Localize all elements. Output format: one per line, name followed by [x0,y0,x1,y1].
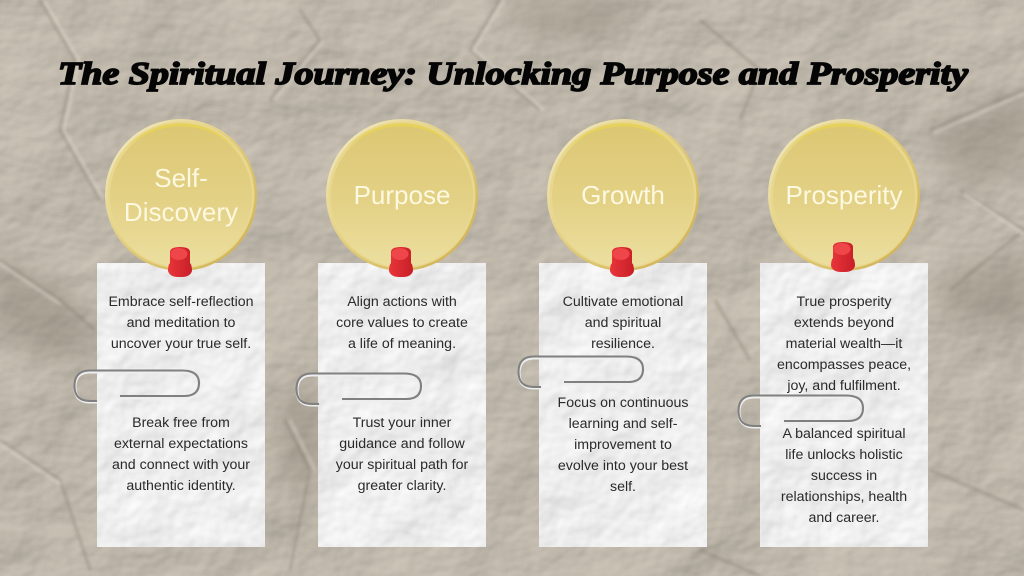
text: Purpose second point: guidance and follow [339,436,465,452]
text: Self-Discovery second point: external expectations [114,436,248,452]
card: Growth paper [539,263,707,547]
text: Growth second point: learning and self- [569,416,678,432]
badge: Purpose [326,119,478,271]
text: Prosperity first point [777,294,911,394]
icon: red push pin [831,242,855,272]
text: Self-Discovery first point: Embrace self-reflection [108,294,254,310]
panel: Purpose [296,119,486,547]
text: Self-Discovery second point [112,415,250,494]
text: Purpose first point [336,294,468,352]
card: Self-Discovery paper [97,263,265,547]
text: Purpose first point: core values to create [336,315,468,331]
text: Growth first point: and spiritual [585,315,661,331]
text: Self-Discovery first point [108,294,254,352]
text: Prosperity second point [781,426,907,526]
icon: paperclip [738,396,864,427]
text: Growth first point: Cultivate emotional [563,294,683,310]
text: Purpose first point: Align actions with [347,294,457,310]
text: Prosperity second point: life unlocks holistic [785,447,903,463]
badge: Growth [547,119,699,271]
text: Purpose second point: your spiritual path for [336,457,469,473]
icon: paperclip [296,374,422,405]
card: Prosperity paper [760,263,928,547]
card: Purpose paper [318,263,486,547]
text: Growth second point: self. [610,479,636,495]
text: Prosperity second point: A balanced spiritual [782,426,906,442]
text: Growth second point: evolve into your best [558,458,688,474]
text: Growth first point [563,294,683,352]
text: Prosperity first point: extends beyond [794,315,894,331]
badge: Self-Discovery: Discovery [124,197,238,227]
icon: paperclip [518,356,644,388]
badge: Prosperity: Prosperity [785,180,903,210]
icon: red push pin [389,247,413,277]
text: Prosperity second point: success in [811,468,877,484]
text: Growth first point: resilience. [591,336,655,352]
text: Purpose second point [336,415,469,494]
text: Prosperity second point: relationships, health [781,489,907,505]
text: Self-Discovery second point: authentic identity. [126,478,236,494]
text: Purpose first point: a life of meaning. [348,336,456,352]
panel: Self-Discovery [74,119,265,547]
title: The Spiritual Journey: Unlocking Purpose and Prosperity [58,55,969,91]
text: Prosperity first point: joy, and fulfilment. [786,378,901,394]
text: Growth second point: Focus on continuous [558,395,688,411]
text: Self-Discovery first point: and meditation to [127,315,236,331]
badge: Self-Discovery: Self- [154,163,208,193]
badge: Purpose: Purpose [354,180,450,210]
text: Growth second point [558,395,688,495]
text: Self-Discovery first point: uncover your true self. [111,336,251,352]
text: Purpose second point: greater clarity. [358,478,446,494]
text: Prosperity first point: True prosperity [797,294,892,310]
badge: Prosperity [768,119,920,271]
text: Prosperity first point: material wealth—it [786,336,902,352]
icon: paperclip [74,370,200,402]
text: Self-Discovery second point: Break free from [132,415,230,431]
text: Prosperity second point: and career. [808,510,880,526]
badge: Growth: Growth [581,180,665,210]
text: Growth second point: improvement to [574,437,672,453]
badge: Self-Discovery [105,119,257,271]
text: Prosperity first point: encompasses peace, [777,357,911,373]
text: Self-Discovery second point: and connect with your [112,457,250,473]
text: Purpose second point: Trust your inner [353,415,452,431]
icon: red push pin [168,247,192,277]
panel: Growth [518,119,707,547]
icon: red push pin [610,247,634,277]
panel: Prosperity [738,119,928,547]
